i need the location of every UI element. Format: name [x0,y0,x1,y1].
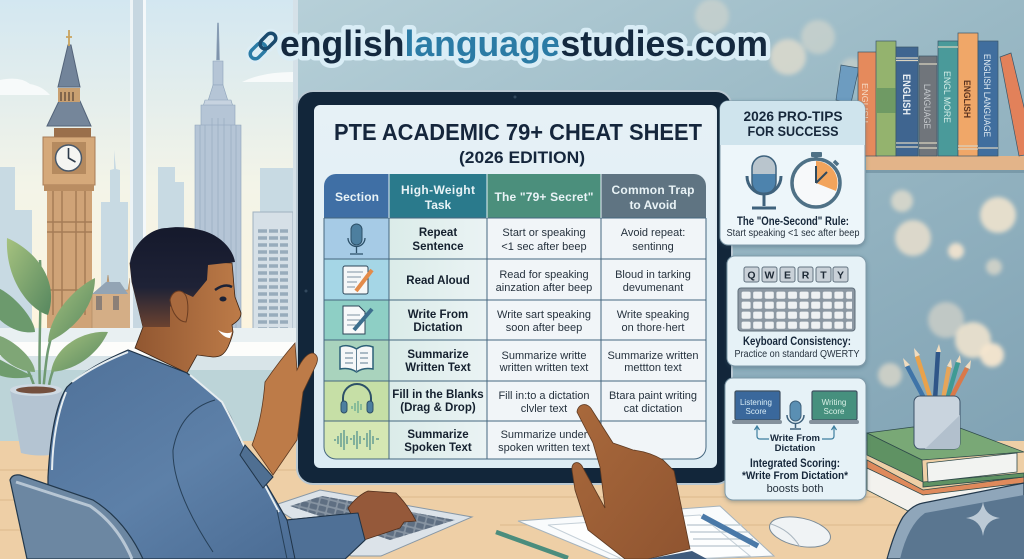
laptop: writing score: Writing [822,398,846,407]
tablet [297,91,732,484]
bookshelf: LANGUAGE [921,84,932,129]
task names: Sentence [412,241,464,253]
79+ secrets: written written text [499,362,588,374]
write from dictation label [770,433,820,454]
common traps: Avoid repeat: [621,227,685,239]
QWERTY keycaps: Q [747,270,756,282]
clouds [0,72,294,95]
scoring text: *Write From Dictation* [742,470,849,482]
Empire State tower [195,23,241,335]
secret and trap cells [487,218,706,459]
task names: Summarize [407,429,469,441]
laptop [272,490,472,556]
task names: Written Text [405,362,471,374]
stacked green books [867,427,1024,520]
common traps: sentinng [632,241,674,253]
panel: keyboard consistency: Practice on standard QWERTY [734,349,860,360]
79+ secrets: Read for speaking [499,269,589,281]
write from dictation label: Dictation [775,443,816,454]
79+ secrets: soon after beep [506,322,582,334]
79+ secrets [496,227,592,454]
section colour cells [324,218,389,459]
eye and brow [215,286,232,302]
task names: Dictation [413,322,463,334]
icon: chain link [248,31,278,61]
hand on laptop [348,491,416,540]
bokeh lights [695,0,1016,387]
mouse [767,512,833,552]
QWERTY keycaps: T [820,270,827,282]
window with skyline [0,0,298,335]
common traps: Btara paint writing [609,390,697,402]
icon: notepad and pencil [343,266,372,294]
one-second rule text: The "One-Second" Rule: [737,214,849,228]
sleeve [648,551,707,559]
laptop: listening score: Score [746,407,767,416]
table header: Task [425,198,452,212]
window sill [0,328,297,445]
common traps: mettton text [624,362,682,374]
79+ secrets: Summarize under [501,429,588,441]
task names: Summarize [407,349,469,361]
desk [0,441,1024,559]
common traps [607,227,699,415]
common traps: on thore·hert [622,322,684,334]
79+ secrets: Write sart speaking [497,309,591,321]
common traps: devumenant [623,282,683,294]
smile [218,330,232,338]
distant buildings [0,150,293,335]
scoring text: Integrated Scoring: [750,458,840,470]
sleeve seam [173,400,287,559]
panel: keyboard consistency [727,256,866,366]
common traps: Write speaking [617,309,689,321]
shirt [48,350,365,559]
potted plant [0,238,108,456]
task names: Repeat [419,227,457,239]
QWERTY keycaps [744,267,848,282]
right sleeve [287,513,365,559]
task cells [389,218,487,459]
79+ secrets: Summarize writte [502,350,586,362]
79+ secrets: Start or speaking [502,227,586,239]
79+ secrets: <1 sec after beep [501,241,587,253]
79+ secrets: spoken written text [498,442,590,454]
window mullions [130,0,298,335]
task names [392,227,484,454]
pointing hand [572,405,707,559]
chair left [10,475,143,559]
laptop: writing score [809,391,859,424]
keyboard text: Keyboard Consistency: [743,336,851,348]
icon: document and pen [343,306,372,334]
QWERTY keycaps: E [784,270,791,282]
common traps: Summarize written [607,350,699,362]
write from dictation label: Write From [770,433,820,444]
79+ secrets: Fill in:to a dictation [498,390,590,402]
shirt highlights [52,352,279,512]
cheat sheet table [324,174,706,459]
common traps: cat dictation [624,403,682,415]
panel: integrated scoring [725,378,866,500]
table header [324,174,706,218]
sheet subtitle: (2026 EDITION) [459,148,585,167]
icon: stopwatch [792,152,840,207]
task names: Fill in the Blanks [392,389,484,401]
head and neck skin [130,262,241,373]
laptop: writing score: Score [824,407,845,416]
task names: Read Aloud [406,275,470,287]
chair right [887,483,1024,559]
bookshelf [836,33,1024,173]
Parliament building [92,275,132,335]
common traps: Bloud in tarking [615,269,691,281]
hair [130,227,235,327]
bookshelf: ENGLISH LANGUAGE [982,54,992,137]
bookshelf: ENGLISH [860,83,869,123]
Big Ben tower [43,30,95,335]
79+ secrets: clvler text [521,403,567,415]
table header: Common Trap [612,183,694,197]
paper on desk [518,506,774,559]
icon: small microphone [787,401,804,429]
bookshelf: ENGL MORE [941,71,952,123]
tips heading: FOR SUCCESS [748,124,838,139]
table header: The "79+ Secret" [494,190,594,204]
QWERTY keycaps: Y [837,270,844,282]
QWERTY keycaps: R [802,270,810,282]
left hand on tablet [252,343,317,475]
panel: 2026 pro-tips [720,101,865,245]
tablet body [297,91,732,484]
icon: sound wave [334,430,379,450]
tips heading: 2026 PRO-TIPS [744,109,842,124]
pens on desk [496,516,758,558]
task names: Spoken Text [404,442,472,454]
table header: to Avoid [629,198,677,212]
laptop: listening score [732,391,782,424]
bookshelf: ENGLISH [900,74,912,115]
table grid [324,218,706,459]
icon: open book [340,346,373,372]
QWERTY keycaps: W [765,270,775,282]
keyboard [738,288,855,331]
ear [170,291,188,322]
sheet title: PTE ACADEMIC 79+ CHEAT SHEET [334,119,702,145]
cuff [240,445,273,488]
icon: microphone [348,224,365,254]
pencil cup with pencils [903,344,971,449]
tips heading [744,109,842,139]
scoring text: boosts both [767,483,823,495]
person [48,227,416,559]
panel: 2026 pro-tips: Start speaking <1 sec after beep [726,228,860,239]
79+ secrets: ainzation after beep [496,282,592,294]
icon: headphones [341,384,373,413]
scoring text [742,458,849,495]
site banner [248,23,768,64]
office block [253,212,293,335]
bookshelf: ENGLISH [961,80,972,118]
table header: Section [335,190,379,204]
task names: Write From [408,309,468,321]
tablet screen [314,105,717,468]
arrows to scores [754,426,836,439]
table header: High-Weight [401,183,475,197]
icon: studio microphone [747,156,781,208]
laptop: listening score: Listening [740,398,772,407]
task names: (Drag & Drop) [400,402,476,414]
site name: englishlanguagestudies.com [280,23,768,64]
